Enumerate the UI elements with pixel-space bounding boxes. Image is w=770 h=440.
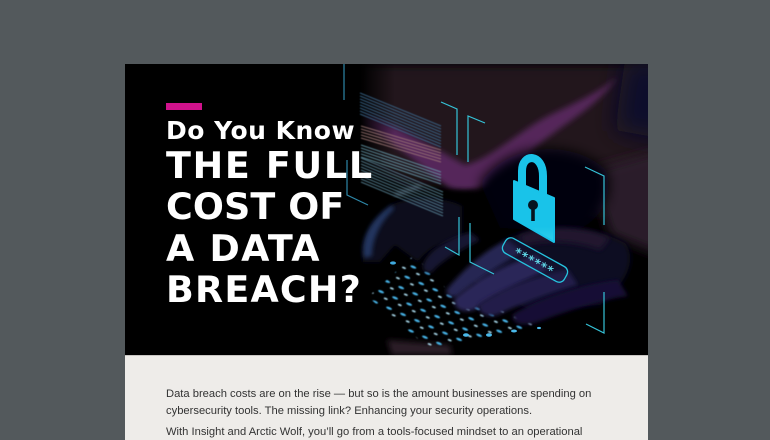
title [166, 116, 374, 311]
panel: intro text [125, 355, 648, 440]
title: line 4: BREACH? [166, 268, 362, 311]
title: line 2: COST OF [166, 185, 344, 228]
background: dim purple haze [125, 60, 670, 355]
illustration: hands typing on laptop with security graphics [343, 64, 648, 355]
paragraph 1: Data breach costs are on the rise — but so is the amount businesses are spending on [166, 388, 591, 400]
title: line 1: THE FULL [166, 144, 374, 187]
password field [500, 236, 570, 284]
corner brackets [344, 64, 604, 333]
icon: padlock [514, 158, 554, 242]
panel: hero image [125, 64, 648, 355]
title: line 3: A DATA [166, 227, 321, 270]
accent bar [166, 103, 202, 110]
striped data panels [360, 93, 443, 216]
paragraph 1: cybersecurity tools. The missing link? Enhancing your security operations. [166, 405, 532, 417]
laptop keyboard [368, 256, 543, 355]
hands [362, 198, 630, 324]
title: lead-in line: Do You Know [166, 116, 355, 145]
paragraph 2: With Insight and Arctic Wolf, you’ll go from a tools-focused mindset to an operational [166, 426, 582, 438]
paragraph 1 [166, 388, 591, 417]
password field: ****** [512, 245, 557, 278]
